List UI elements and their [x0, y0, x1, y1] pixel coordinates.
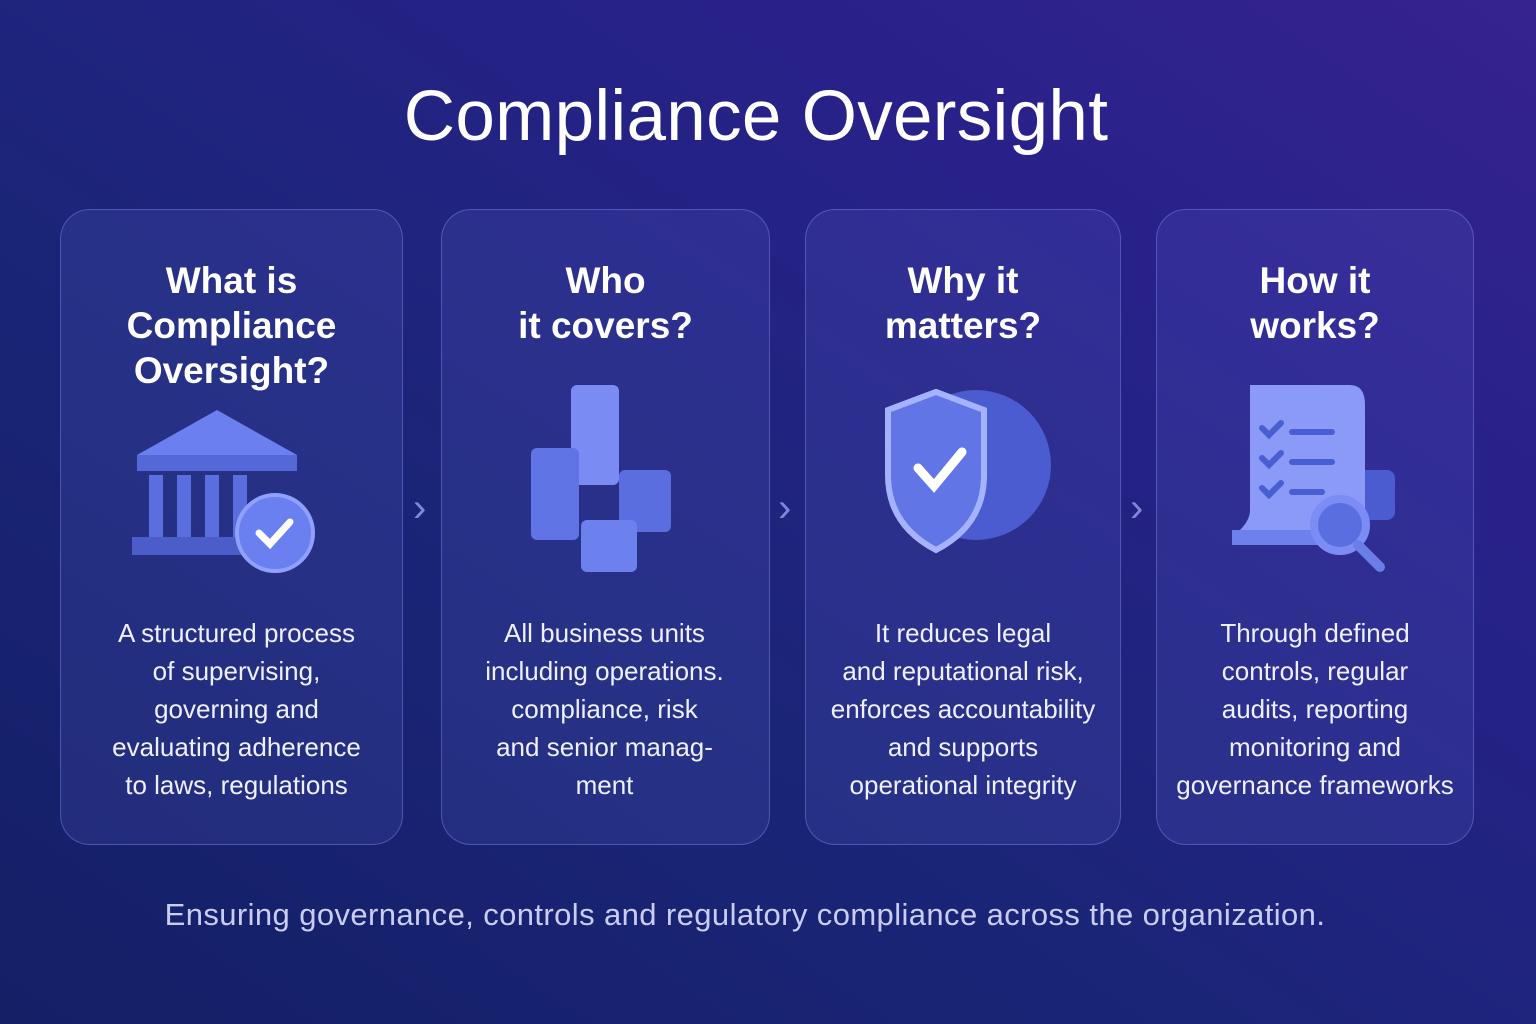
text: why [831, 618, 1096, 800]
heading: who: it covers? [518, 305, 693, 346]
text: who [485, 618, 724, 800]
text: how: audits, reporting [1222, 694, 1408, 724]
text: why: and supports [888, 732, 1038, 762]
text: who: including operations. [485, 656, 724, 686]
text: what: evaluating adherence [112, 732, 361, 762]
text: who: ment [576, 770, 633, 800]
heading: why [885, 260, 1041, 346]
heading: how: works? [1250, 305, 1380, 346]
title: Compliance Oversight [404, 77, 1108, 156]
text: what: to laws, regulations [125, 770, 348, 800]
panel: who [441, 209, 770, 845]
heading: what: Oversight? [134, 350, 329, 391]
heading: who [518, 260, 693, 346]
text: why: enforces accountability [831, 694, 1095, 724]
heading: who: Who [565, 260, 646, 301]
text: why: It reduces legal [875, 618, 1051, 648]
text: why: and reputational risk, [842, 656, 1084, 686]
heading: how [1250, 260, 1380, 346]
heading: what: What is [166, 260, 297, 301]
panel: what [60, 209, 403, 845]
text: how: monitoring and [1229, 732, 1401, 762]
icon: shield and globe [885, 388, 1051, 554]
text: who: All business units [504, 618, 705, 648]
footer: Ensuring governance, controls and regulatory compliance across the organization. [165, 897, 1325, 932]
text: what: governing and [154, 694, 319, 724]
text: how: controls, regular [1222, 656, 1408, 686]
text: how: governance frameworks [1176, 770, 1454, 800]
text: how [1176, 618, 1454, 800]
heading: why: matters? [885, 305, 1041, 346]
text: who: and senior manag- [496, 732, 713, 762]
arrow 2: › [778, 486, 791, 530]
text: why: operational integrity [850, 770, 1076, 800]
icon: blocks [531, 385, 671, 572]
heading: what [127, 260, 336, 391]
heading: what: Compliance [127, 305, 336, 346]
text: what: of supervising, [153, 656, 320, 686]
icon: building with check [132, 410, 315, 573]
text: what [112, 618, 361, 800]
text: how: Through defined [1220, 618, 1410, 648]
heading: how: How it [1260, 260, 1370, 301]
panel: why [805, 209, 1121, 845]
text: what: A structured process [118, 618, 355, 648]
icon: checklist with magnifier [1232, 385, 1395, 572]
arrow 1: › [413, 486, 426, 530]
arrow 3: › [1130, 486, 1143, 530]
text: who: compliance, risk [511, 694, 698, 724]
heading: why: Why it [908, 260, 1018, 301]
panel: how [1156, 209, 1474, 845]
